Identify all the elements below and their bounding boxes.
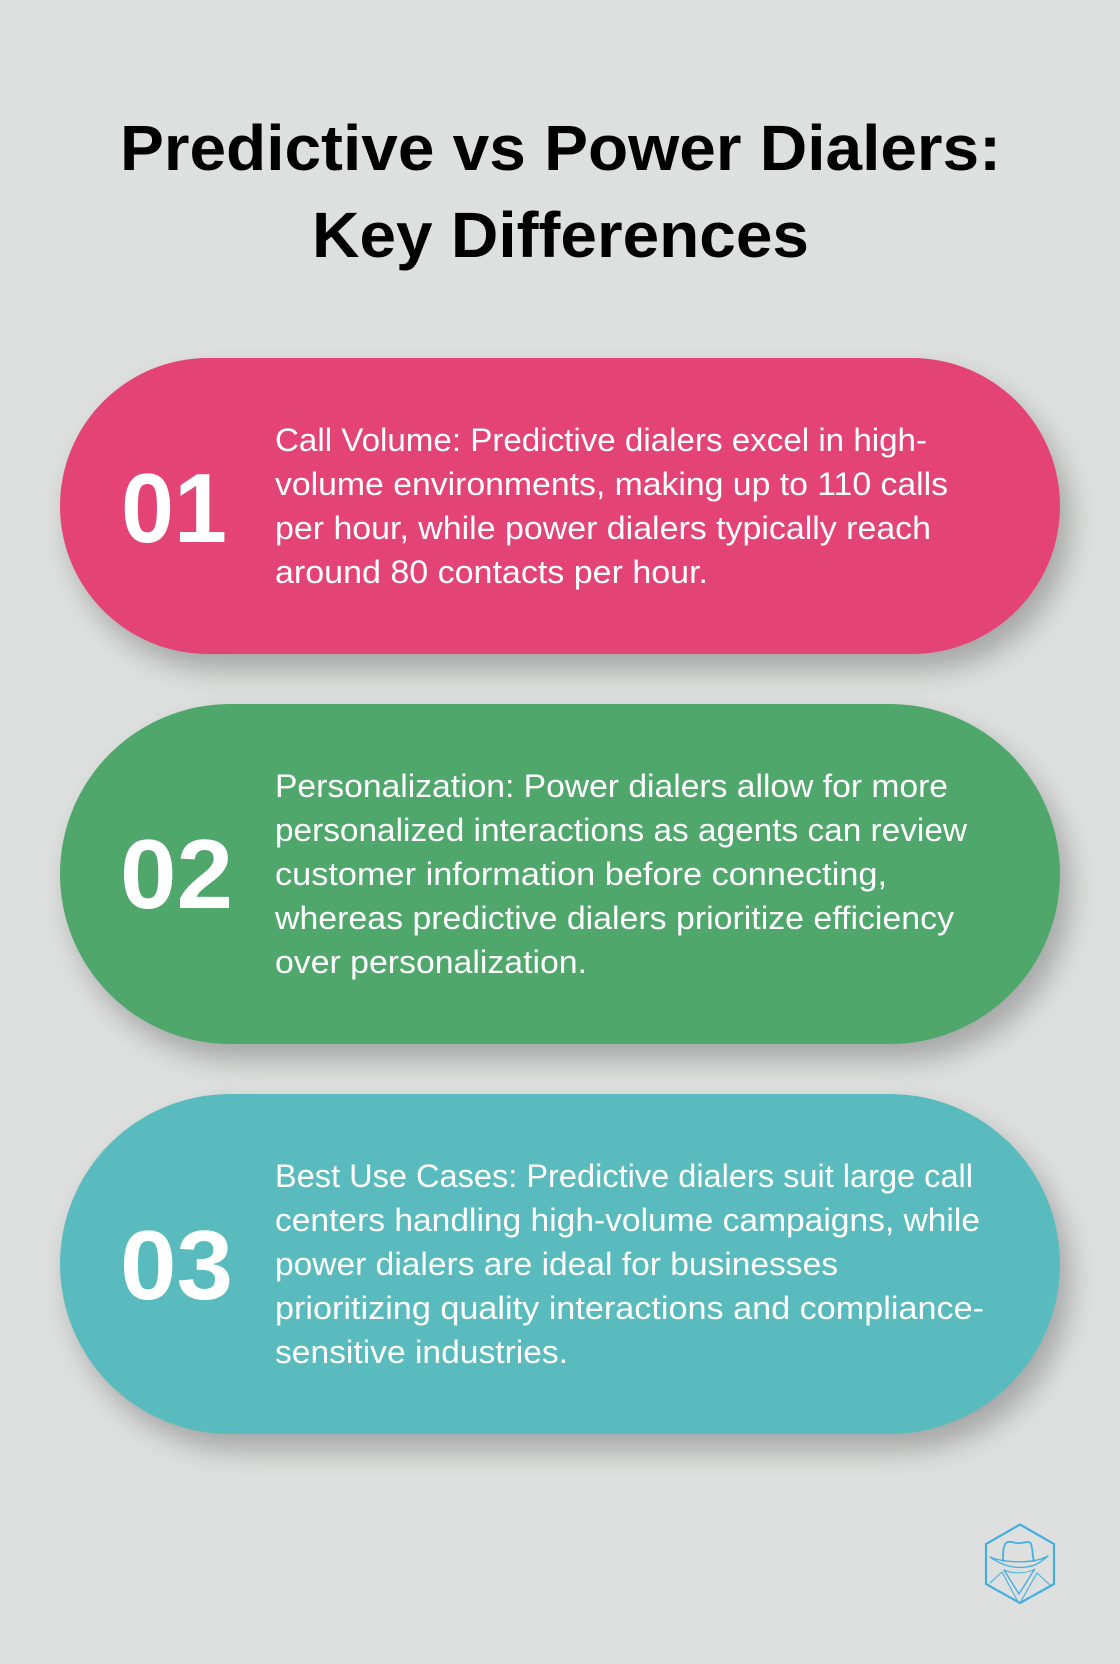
number 03: 03 [120, 1210, 233, 1320]
text: call volume: Call Volume: Predictive dialers excel in high- [275, 422, 927, 458]
text: personalization: personalized interactions as agents can review [275, 812, 968, 848]
panel: best use cases [60, 1094, 1060, 1434]
text: best use cases: prioritizing quality interactions and compliance- [275, 1290, 984, 1326]
text: personalization: customer information before connecting, [275, 856, 887, 892]
panel: call volume [60, 358, 1060, 654]
panel: personalization [60, 704, 1060, 1044]
text: call volume: per hour, while power dialers typically reach [275, 510, 931, 546]
text: best use cases: centers handling high-volume campaigns, while [275, 1202, 980, 1238]
text: personalization [274, 768, 968, 980]
text: personalization: over personalization. [275, 944, 587, 980]
number 01: 01 [121, 453, 227, 563]
text: best use cases [275, 1158, 984, 1370]
text: call volume: around 80 contacts per hour. [275, 554, 708, 590]
text: best use cases: Best Use Cases: Predictive dialers suit large call [275, 1158, 973, 1194]
text: best use cases: power dialers are ideal for businesses [275, 1246, 838, 1282]
title: Key Differences [312, 199, 809, 271]
text: best use cases: sensitive industries. [275, 1334, 568, 1370]
text: personalization: whereas predictive dialers prioritize efficiency [274, 900, 954, 936]
text: call volume: volume environments, making up to 110 calls [275, 466, 948, 502]
text: personalization: Personalization: Power dialers allow for more [275, 768, 948, 804]
icon: hexagon spy logo [984, 1523, 1056, 1604]
title [120, 112, 1001, 271]
number 02: 02 [120, 819, 233, 929]
title: Predictive vs Power Dialers: [120, 112, 1001, 184]
text: call volume [275, 422, 948, 590]
